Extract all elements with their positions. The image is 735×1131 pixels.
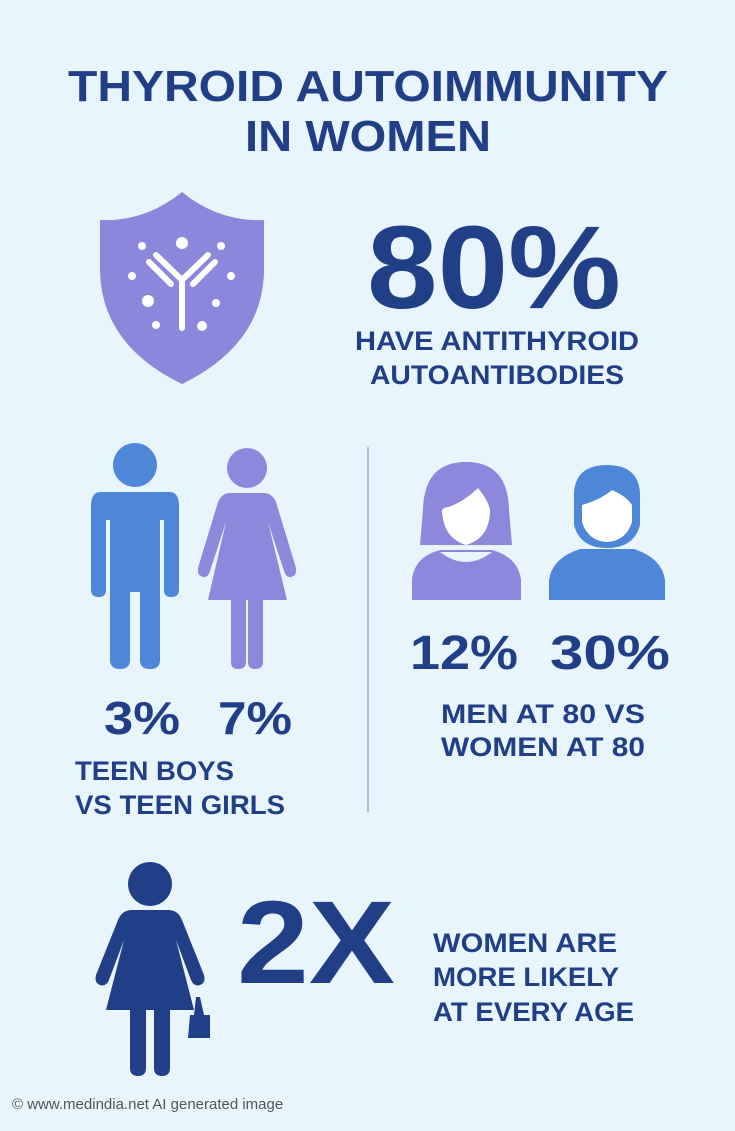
stat: 80% xyxy=(355,202,639,390)
icon: shield with antibody xyxy=(100,192,264,384)
stat: 2X: MORE LIKELY xyxy=(433,962,619,992)
title xyxy=(68,62,668,161)
stat: teen boys vs girls: VS TEEN GIRLS xyxy=(75,790,285,820)
stat: 80%: HAVE ANTITHYROID xyxy=(355,326,639,356)
icon: woman with handbag xyxy=(96,862,210,1076)
stat: men vs women at 80: 12% xyxy=(410,627,518,680)
stat: men vs women at 80: 30% xyxy=(550,627,670,680)
icon: boy figure xyxy=(91,443,179,669)
stat: teen boys vs girls: TEEN BOYS xyxy=(75,756,234,786)
stat: 2X: 2X xyxy=(237,877,395,1009)
footer credit: © www.medindia.net AI generated image xyxy=(12,1096,283,1113)
icon: man bust xyxy=(549,465,665,600)
stat: 80%: AUTOANTIBODIES xyxy=(370,360,624,390)
stat: 2X: WOMEN ARE xyxy=(433,928,617,958)
stat: men vs women at 80 xyxy=(410,627,670,762)
stat: 2X xyxy=(237,877,634,1027)
stat: men vs women at 80: MEN AT 80 VS xyxy=(441,699,645,729)
title: IN WOMEN xyxy=(245,112,491,161)
stat: teen boys vs girls: 7% xyxy=(218,692,292,744)
icon: woman bust xyxy=(412,462,521,600)
stat: teen boys vs girls: 3% xyxy=(104,692,180,744)
icon: girl figure xyxy=(198,448,296,669)
stat: teen boys vs girls xyxy=(75,692,292,820)
stat: 2X: AT EVERY AGE xyxy=(433,997,634,1027)
title: THYROID AUTOIMMUNITY xyxy=(68,62,668,111)
stat: men vs women at 80: WOMEN AT 80 xyxy=(441,732,645,762)
stat: 80%: 80% xyxy=(367,202,621,334)
